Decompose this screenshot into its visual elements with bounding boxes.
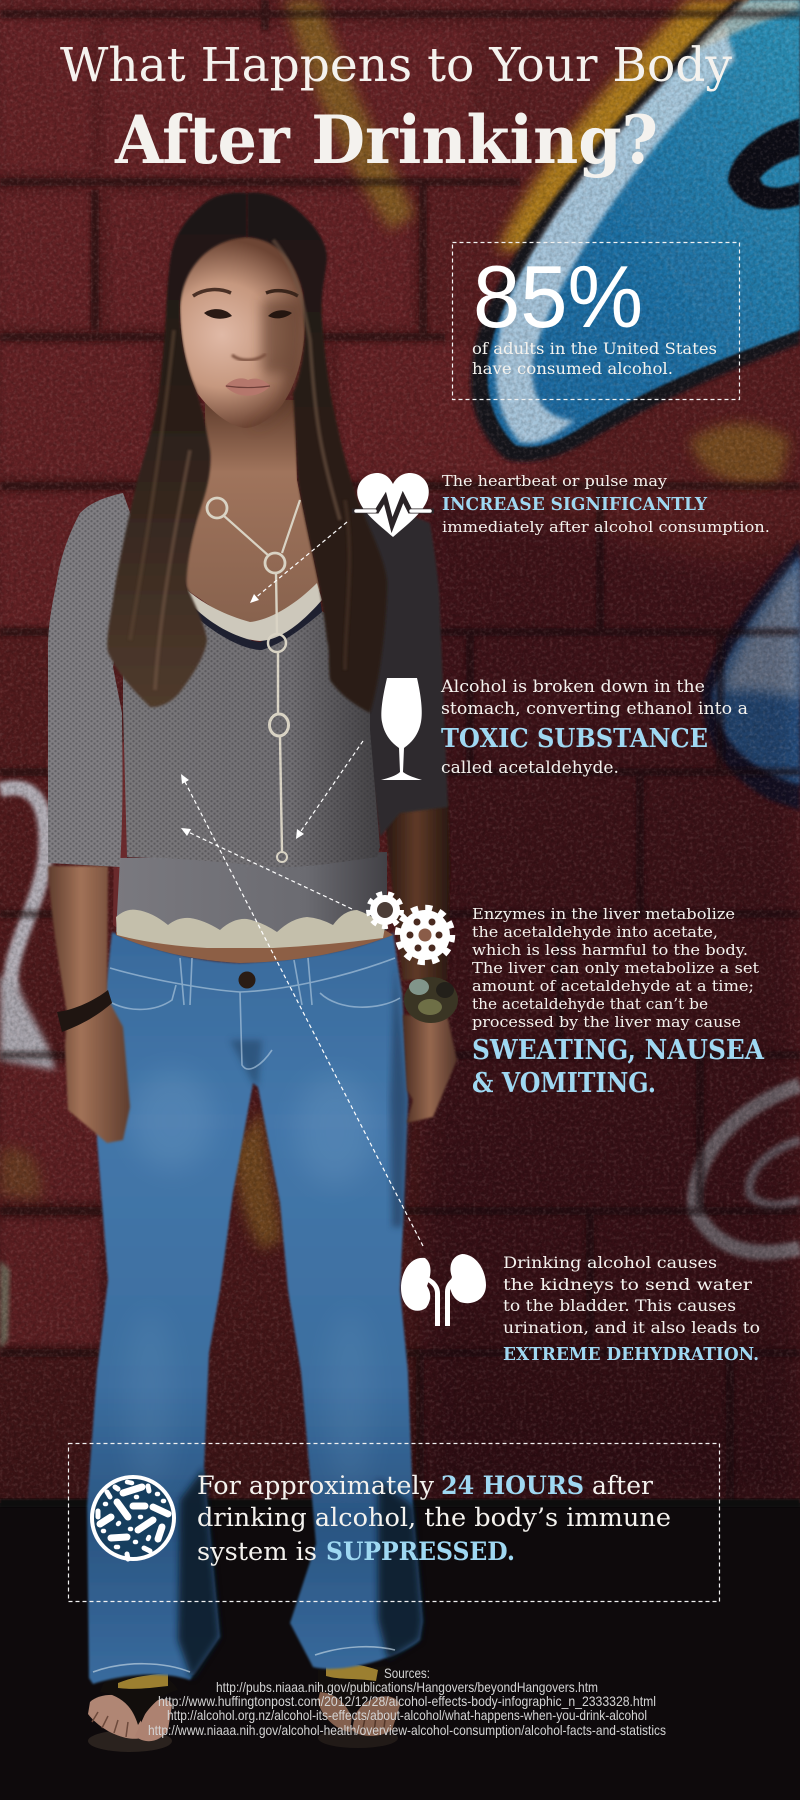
text: 24 hours suppressed: after — [592, 1471, 653, 1500]
text: kidneys: EXTREME DEHYDRATION. — [503, 1344, 759, 1365]
title — [60, 38, 732, 179]
sources: http://www.niaaa.nih.gov/alcohol-health/overview-alcohol-consumption/alcohol-facts-and-statistics — [148, 1722, 666, 1738]
bracelet right — [404, 977, 458, 1023]
shirt body — [123, 600, 380, 867]
icon: bacteria circle — [92, 1477, 174, 1559]
text: stomach: Alcohol is broken down in the — [440, 677, 705, 697]
text: liver enzymes — [472, 905, 765, 1099]
text: heartbeat: INCREASE SIGNIFICANTLY — [442, 494, 708, 515]
face shadow — [250, 300, 304, 428]
right arm and hand — [383, 800, 457, 1123]
text: heartbeat: The heartbeat or pulse may — [442, 472, 668, 490]
callout: 85 percent of adults: of adults in the United States — [472, 339, 717, 358]
text: kidneys: to the bladder. This causes — [503, 1296, 736, 1315]
left sleeve mesh texture — [48, 493, 140, 867]
feet and sandals — [88, 1664, 400, 1752]
text: 24 hours suppressed — [197, 1471, 671, 1566]
text: kidneys — [503, 1253, 760, 1365]
title: After Drinking? — [114, 101, 658, 179]
lace hem — [116, 910, 385, 948]
sources: Sources: — [384, 1665, 430, 1681]
text: stomach: TOXIC SUBSTANCE — [441, 724, 708, 754]
callout: 85 percent of adults: 85% — [473, 247, 643, 346]
icon: gears — [368, 894, 452, 962]
wall slivers beside torso — [113, 740, 127, 930]
arrow: heart to chest — [250, 522, 347, 603]
jeans shading — [93, 958, 423, 1680]
neck and chest — [183, 400, 320, 640]
text: heartbeat — [442, 472, 770, 536]
sources: http://pubs.niaaa.nih.gov/publications/Hangovers/beyondHangovers.htm — [216, 1679, 598, 1695]
text: liver enzymes: the acetaldehyde that can’t be — [472, 995, 708, 1013]
icon: kidneys — [401, 1254, 486, 1326]
text: liver enzymes: Enzymes in the liver metabolize — [472, 905, 735, 923]
text: 24 hours suppressed: system is — [197, 1537, 317, 1566]
callout: 85 percent of adults: have consumed alcohol. — [472, 359, 673, 378]
shirt mesh texture — [123, 600, 380, 867]
sources: http://www.huffingtonpost.com/2012/12/28/alcohol-effects-body-infographic_n_2333328.html — [158, 1693, 656, 1709]
text: 24 hours suppressed: drinking alcohol, the body’s immune — [197, 1503, 671, 1532]
text: 24 hours suppressed: SUPPRESSED. — [326, 1537, 515, 1566]
text: kidneys: the kidneys to send water — [503, 1275, 752, 1294]
text: liver enzymes: processed by the liver may cause — [472, 1013, 741, 1031]
arrow: gears to liver — [181, 828, 352, 909]
text: liver enzymes: amount of acetaldehyde at a time; — [472, 977, 754, 995]
hair: left curtain — [107, 193, 247, 707]
arrow: kidneys to lower torso — [181, 774, 423, 1246]
left sleeve — [48, 493, 140, 867]
arrow: glass to stomach — [296, 741, 363, 839]
text: liver enzymes: & VOMITING. — [472, 1068, 656, 1099]
text: kidneys: Drinking alcohol causes — [503, 1253, 717, 1272]
title: What Happens to Your Body — [60, 38, 732, 93]
hair: right curtain — [247, 193, 387, 713]
icon: wine glass — [381, 678, 422, 780]
text: liver enzymes: the acetaldehyde into acetate, — [472, 923, 718, 941]
undershirt — [116, 852, 387, 944]
text: kidneys: urination, and it also leads to — [503, 1318, 760, 1337]
text: stomach — [440, 677, 748, 778]
hair highlights — [130, 240, 349, 690]
right sleeve — [360, 495, 448, 837]
midriff — [116, 930, 393, 963]
text: 24 hours suppressed: 24 HOURS — [441, 1471, 584, 1500]
facial features — [193, 290, 298, 396]
left arm and hand — [48, 866, 130, 1143]
necklace — [207, 498, 300, 862]
face — [180, 237, 305, 428]
bracelet left — [57, 990, 112, 1032]
photo: young woman standing — [48, 193, 458, 1752]
text: stomach: called acetaldehyde. — [441, 758, 619, 778]
panel: immune system callout — [68, 1444, 720, 1602]
dark neckline band — [190, 598, 322, 650]
text: 24 hours suppressed: For approximately — [197, 1471, 435, 1500]
text: stomach: stomach, converting ethanol into a — [441, 699, 748, 719]
jeans — [87, 932, 423, 1684]
text: liver enzymes: The liver can only metabolize a set — [472, 959, 759, 977]
sources — [148, 1665, 666, 1738]
text: heartbeat: immediately after alcohol consumption. — [442, 518, 770, 536]
sources: http://alcohol.org.nz/alcohol-its-effects/about-alcohol/what-happens-when-you-drink-alcohol — [167, 1707, 647, 1723]
lace neckline — [187, 583, 322, 641]
callout: 85 percent of adults — [452, 242, 740, 400]
text: liver enzymes: which is less harmful to the body. — [472, 941, 748, 959]
text: liver enzymes: SWEATING, NAUSEA — [472, 1035, 765, 1066]
icon: heart with pulse — [352, 473, 434, 537]
